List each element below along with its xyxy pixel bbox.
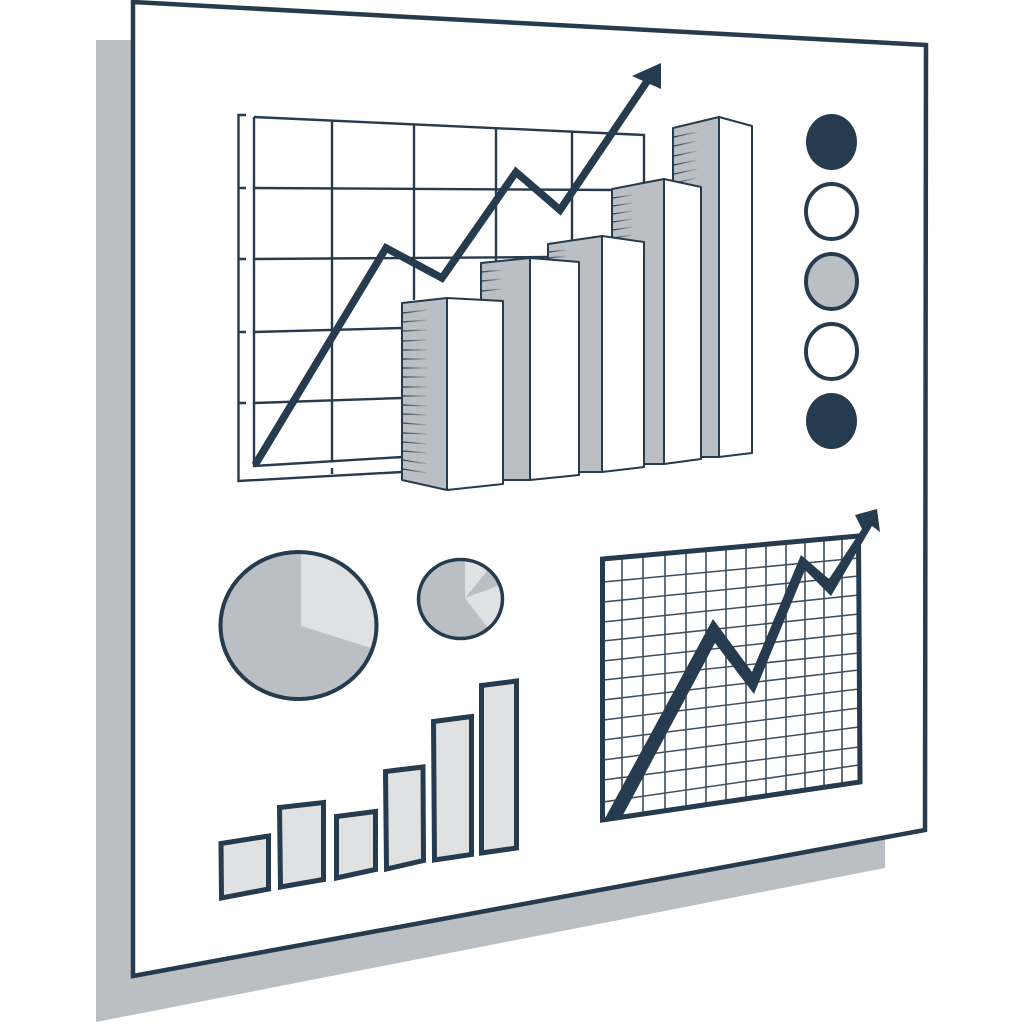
grid [254, 117, 644, 466]
pie chart: large [220, 552, 376, 699]
panel shadow [96, 40, 885, 1022]
chart: large grid with bars and arrow [238, 63, 752, 490]
legend dots [806, 114, 857, 449]
axes [238, 115, 402, 481]
arrow: rising trend line [255, 63, 661, 465]
bar 4 [612, 179, 701, 464]
chart: small grid with arrow [602, 509, 880, 822]
bar chart: small [221, 681, 516, 898]
pie chart: small [418, 560, 502, 638]
bar 3 [548, 236, 644, 472]
arrow: rising trend line [603, 509, 880, 822]
panel: board [133, 2, 926, 976]
grid [603, 537, 859, 817]
bar 1 [402, 298, 503, 490]
bar 2 [481, 258, 579, 480]
bar 5 [673, 117, 752, 457]
frame [602, 536, 860, 820]
